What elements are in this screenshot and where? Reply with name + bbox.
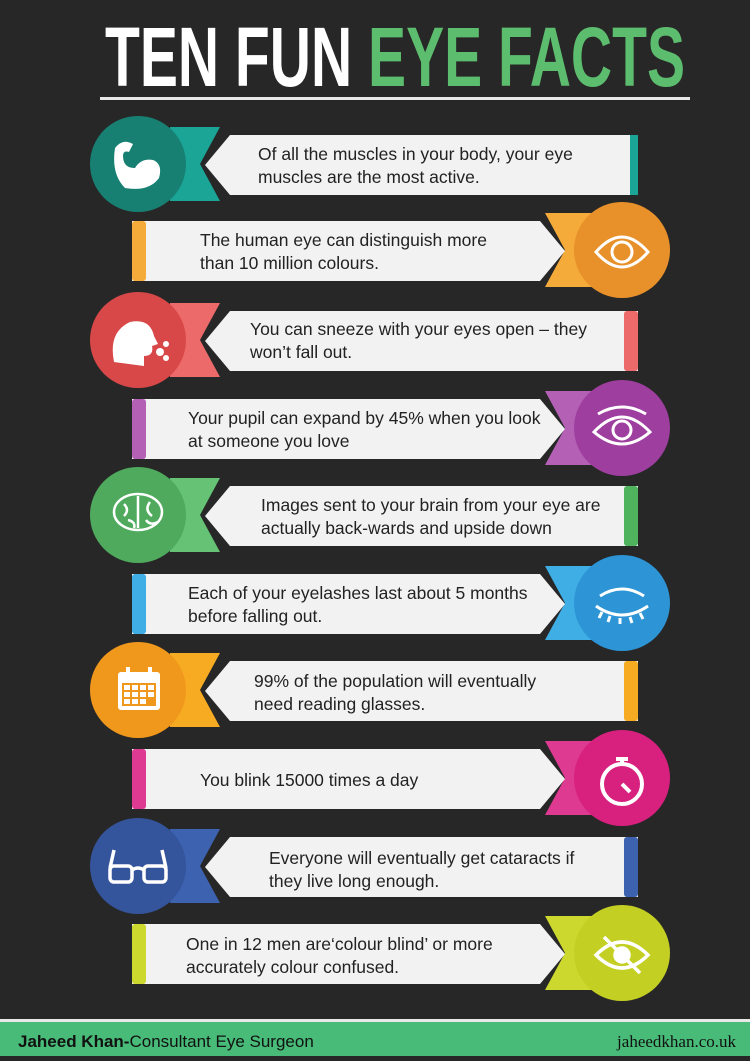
- icon: eye: [596, 237, 648, 267]
- footer: [0, 1019, 750, 1056]
- fact 9: they live long enough.: [269, 871, 439, 891]
- fact 4: [132, 380, 670, 476]
- fact 3: [90, 292, 638, 388]
- fact 2: [132, 202, 670, 298]
- footer: Jaheed Khan-Consultant Eye Surgeon: [18, 1032, 314, 1051]
- fact 3: You can sneeze with your eyes open – they: [250, 319, 587, 339]
- icon: stopwatch: [602, 759, 642, 804]
- icon: muscle: [114, 142, 160, 189]
- footer: jaheedkhan.co.uk: [616, 1032, 736, 1051]
- fact 1: [90, 116, 638, 212]
- fact 2: than 10 million colours.: [200, 253, 379, 273]
- fact 7: need reading glasses.: [254, 694, 425, 714]
- fact 1: Of all the muscles in your body, your eye: [258, 144, 573, 164]
- fact 8: You blink 15000 times a day: [200, 770, 419, 790]
- fact 6: [132, 555, 670, 651]
- fact 5: [90, 467, 638, 563]
- fact 7: [90, 642, 638, 738]
- fact 9: [90, 818, 638, 914]
- fact 6: before falling out.: [188, 606, 322, 626]
- icon: sneeze: [113, 321, 169, 366]
- icon: eye: [594, 407, 650, 444]
- fact 5: Images sent to your brain from your eye are: [261, 495, 600, 515]
- fact 4: at someone you love: [188, 431, 350, 451]
- icon: closed eye: [596, 589, 648, 624]
- fact 4: Your pupil can expand by 45% when you look: [188, 408, 541, 428]
- fact 8: [132, 730, 670, 826]
- icon: calendar: [118, 667, 160, 710]
- icon: glasses: [110, 850, 166, 882]
- fact 6: Each of your eyelashes last about 5 months: [188, 583, 528, 603]
- fact 3: won’t fall out.: [249, 342, 352, 362]
- fact 1: muscles are the most active.: [258, 167, 480, 187]
- fact 10: [132, 905, 670, 1001]
- fact 7: 99% of the population will eventually: [254, 671, 536, 691]
- fact 5: actually back-wards and upside down: [261, 518, 552, 538]
- fact 2: The human eye can distinguish more: [200, 230, 487, 250]
- icon: brain: [114, 494, 162, 530]
- fact 9: Everyone will eventually get cataracts if: [269, 848, 575, 868]
- icon: crossed eye: [596, 937, 648, 973]
- fact 10: One in 12 men are‘colour blind’ or more: [186, 934, 493, 954]
- fact 10: accurately colour confused.: [186, 957, 399, 977]
